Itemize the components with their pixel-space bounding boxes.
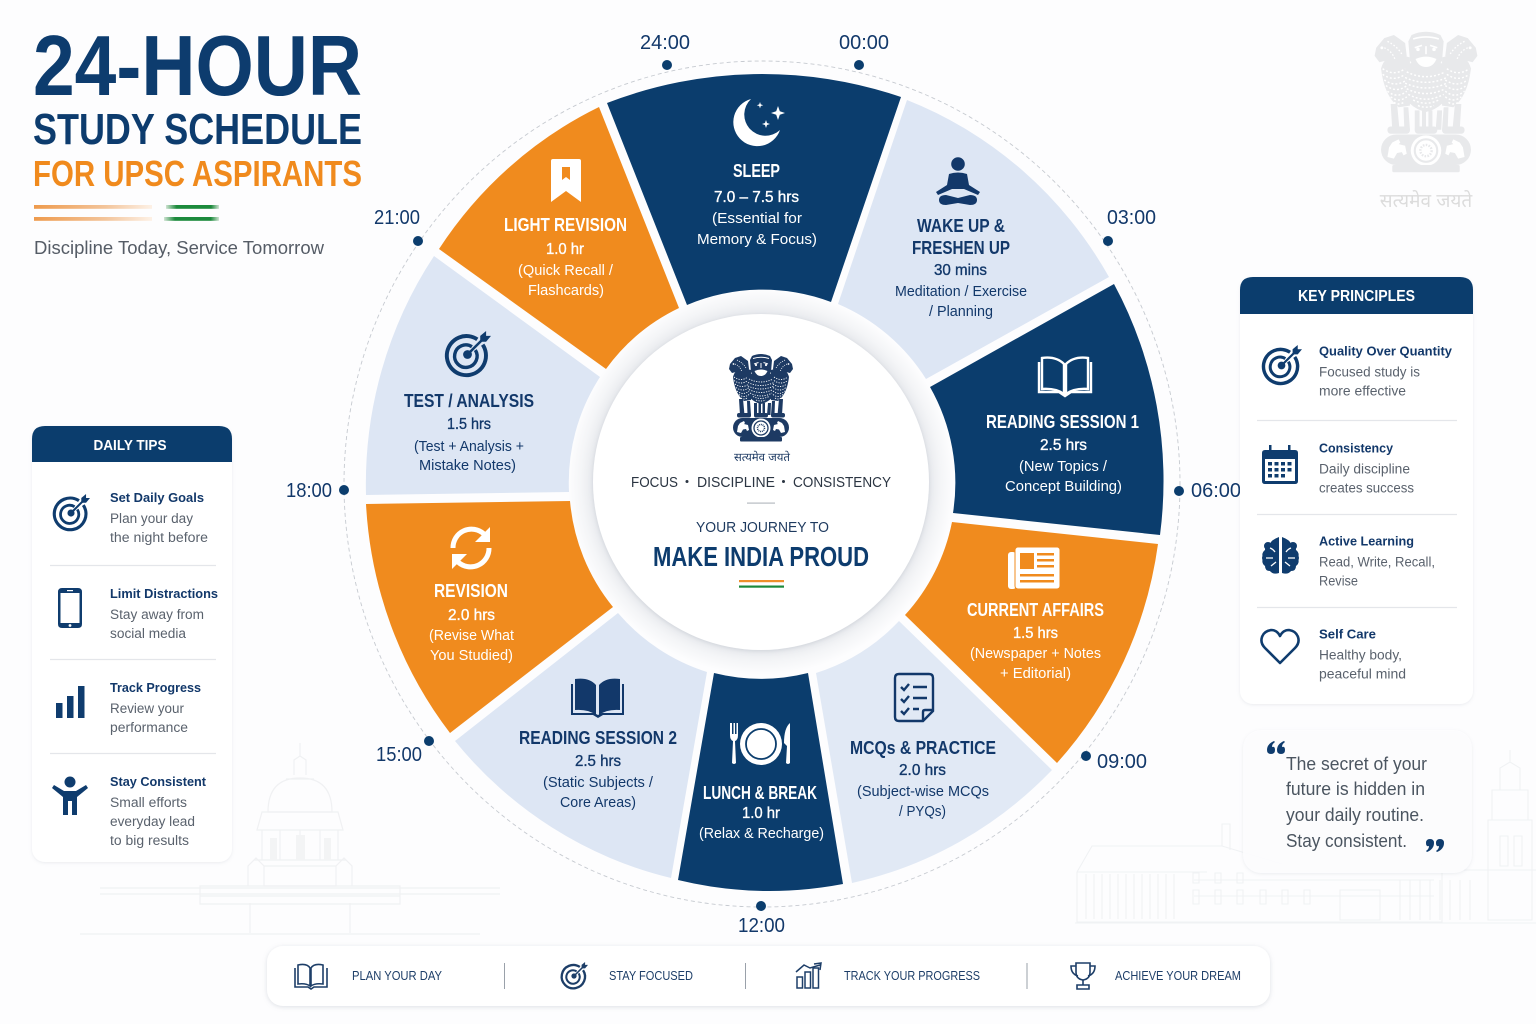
marker 03:00 [1103,207,1156,246]
sector: light revision [439,107,679,369]
principle: active learning: Revise [1319,574,1358,588]
details: current affairs: (Newspaper + Notes [970,646,1101,662]
title: study schedule: STUDY SCHEDULE [33,105,362,154]
action: plan your day: PLAN YOUR DAY [352,968,442,983]
centre tagline: FOCUS [631,475,678,491]
tip: limit distractions: social media [110,626,186,641]
action: track your progress [796,963,980,988]
principle: active learning: Read, Write, Recall, [1319,554,1435,570]
sector: reading session 1 [930,284,1164,535]
heading: reading session 2: READING SESSION 2 [519,727,677,748]
principle: quality over quantity: more effective [1319,384,1406,398]
marker 00:00: 00:00 [839,32,889,54]
header: key principles [1240,277,1473,314]
tip: stay consistent [52,774,207,848]
centre tagline [631,475,891,491]
header: key principles: KEY PRINCIPLES [1298,288,1415,305]
icon: checklist [895,674,933,721]
principle: self care: Healthy body, [1319,648,1402,662]
tip: set daily goals: Set Daily Goals [110,490,204,505]
sector: lunch and break [678,673,843,891]
principle: self care [1261,626,1406,682]
details: light revision: Flashcards) [528,283,604,299]
icon: refresh arrows [452,527,490,569]
quote card [1243,730,1472,873]
details: test and analysis: (Test + Analysis + [414,439,524,455]
icon: moon and stars [733,99,785,146]
details: test and analysis [414,416,524,474]
principle: quality over quantity: Quality Over Quantity [1319,344,1453,358]
marker 18:00: 18:00 [286,480,332,502]
tip: stay consistent: Stay Consistent [110,774,207,789]
heading: revision: REVISION [434,580,508,601]
icon: target [447,331,491,375]
details: mcqs and practice: 2.0 hrs [899,762,946,779]
tip: set daily goals: Plan your day [110,511,193,526]
tip: stay consistent: to big results [110,833,189,848]
heading: lunch and break: LUNCH & BREAK [703,782,817,803]
details: sleep [697,189,817,248]
details: lunch and break: 1.0 hr [742,805,780,822]
watermark: secretariat building [1075,750,1536,923]
opening quote mark [1267,741,1285,754]
principle: consistency: Consistency [1319,440,1394,456]
marker 00:00 [839,32,889,70]
sector: test and analysis [366,256,600,495]
details: mcqs and practice [857,762,989,820]
details: reading session 1: 2.5 hrs [1040,437,1087,454]
quote text: Stay consistent. [1286,831,1407,851]
white mask over ring gap [568,289,954,675]
action: track your progress: TRACK YOUR PROGRESS [844,968,980,983]
tip: limit distractions [58,586,218,641]
action: plan your day [295,964,442,989]
details: test and analysis: 1.5 hrs [447,416,491,433]
principle: quality over quantity [1263,344,1453,398]
icon: newspaper [1008,547,1060,589]
watermark motto: सत्यमेव जयते [1380,189,1473,212]
principle: self care: Self Care [1319,626,1376,642]
panel: daily tips [32,426,232,862]
tip: track progress: Review your [110,701,184,716]
tip: track progress: performance [110,720,188,735]
centre tagline: CONSISTENCY [793,475,891,491]
details: current affairs [970,625,1101,682]
marker 15:00 [376,736,434,766]
details: lunch and break: (Relax & Recharge) [699,826,824,842]
marker 21:00: 21:00 [374,207,420,229]
principle: quality over quantity: Focused study is [1319,364,1420,380]
tip: track progress [56,680,201,735]
details: revision: (Revise What [429,628,514,644]
heading: sleep: SLEEP [733,160,780,181]
heading: wake up and freshen up: FRESHEN UP [912,237,1010,258]
details: light revision: (Quick Recall / [518,263,614,279]
details: wake up: Meditation / Exercise [895,284,1027,300]
action: stay focused: STAY FOCUSED [609,968,693,983]
action: achieve your dream: ACHIEVE YOUR DREAM [1115,968,1241,983]
marker 03:00: 03:00 [1107,207,1156,229]
icon: national emblem [729,354,793,442]
header: daily tips [32,426,232,462]
details: test and analysis: Mistake Notes) [419,458,516,474]
details: lunch and break [699,805,824,842]
icon: meditation [936,157,980,205]
marker 12:00: 12:00 [738,915,785,937]
tricolour mini underline [739,580,784,588]
details: reading session 2: (Static Subjects / [543,775,654,791]
tip: limit distractions: Stay away from [110,607,204,622]
sector: mcqs and practice [816,621,1052,883]
details: wake up: / Planning [929,304,993,320]
bottom action bar [267,946,1270,1006]
centre circle [593,314,929,650]
principle: self care: peaceful mind [1319,666,1406,682]
tip: stay consistent: Small efforts [110,795,187,810]
tip: stay consistent: everyday lead [110,814,195,829]
icon: open book [1039,358,1091,396]
heading: light revision: LIGHT REVISION [504,214,627,235]
dashed time ring [344,61,1180,907]
watermark: dome building [80,743,500,934]
quote text: future is hidden in [1286,779,1425,799]
principle: consistency: Daily discipline [1319,462,1410,476]
action: achieve your dream [1071,963,1241,989]
details: wake up [895,262,1027,320]
details: reading session 1 [1005,437,1122,495]
title: for upsc aspirants: FOR UPSC ASPIRANTS [33,153,362,194]
tricolour underline [34,205,219,221]
details: current affairs: 1.5 hrs [1013,625,1058,642]
details: revision: You Studied) [430,648,513,664]
closing quote mark [1426,839,1444,852]
quote text: The secret of your [1286,754,1427,774]
panel: key principles [1240,277,1473,704]
details: sleep: (Essential for [712,211,802,227]
tip: limit distractions: Limit Distractions [110,586,218,601]
centre tagline: DISCIPLINE [697,475,775,491]
details: reading session 1: (New Topics / [1019,459,1108,475]
icon: open book dark [571,679,624,718]
action: stay focused [562,962,693,988]
details: reading session 2 [543,753,654,811]
heading: reading session 1: READING SESSION 1 [986,411,1139,432]
tip: track progress: Track Progress [110,680,201,695]
details: mcqs and practice: / PYQs) [899,804,946,820]
marker 12:00 [738,901,785,937]
details: revision: 2.0 hrs [448,607,495,624]
tip: set daily goals: the night before [110,530,208,545]
icon: bookmark [551,159,581,202]
principle: consistency [1262,440,1414,496]
details: wake up: 30 mins [934,262,987,279]
title block [33,19,362,258]
details: mcqs and practice: (Subject-wise MCQs [857,784,989,800]
marker 15:00: 15:00 [376,744,422,766]
principle: active learning: Active Learning [1319,534,1414,548]
marker 24:00 [640,32,690,70]
marker 06:00: 06:00 [1191,480,1241,502]
heading: wake up and freshen up [912,215,1010,258]
heading: wake up and freshen up: WAKE UP & [917,215,1005,236]
marker 21:00 [374,207,423,246]
tip: set daily goals [54,490,208,545]
principle: active learning [1262,534,1435,588]
quote text: your daily routine. [1286,805,1424,825]
details: sleep: 7.0 – 7.5 hrs [714,189,799,206]
details: light revision [518,241,614,299]
sector: wake up and freshen up [838,100,1109,379]
quote text [1286,754,1427,851]
sector: reading session 2 [455,613,707,878]
heading: current affairs: CURRENT AFFAIRS [967,599,1104,620]
sector: current affairs [905,522,1158,763]
header: daily tips: DAILY TIPS [94,437,166,454]
marker 24:00: 24:00 [640,32,690,54]
schedule wheel [366,74,1164,891]
marker 09:00: 09:00 [1097,751,1147,773]
tagline: Discipline Today, Service Tomorrow [34,237,325,258]
details: light revision: 1.0 hr [546,241,584,258]
watermark: national emblem top right [1375,32,1477,212]
time markers [286,32,1241,937]
details: reading session 1: Concept Building) [1005,479,1122,495]
sector: sleep [607,74,901,305]
heading: test and analysis: TEST / ANALYSIS [404,390,534,411]
principle: consistency: creates success [1319,480,1414,496]
details: reading session 2: Core Areas) [560,795,636,811]
details: revision [429,607,514,664]
centre headline: MAKE INDIA PROUD [653,541,869,572]
centre subtitle: YOUR JOURNEY TO [696,519,829,536]
emblem motto: सत्यमेव जयते [734,450,790,464]
details: current affairs: + Editorial) [1000,666,1071,682]
title: 24-hour: 24-HOUR [33,19,362,114]
sector: revision [366,501,613,733]
details: reading session 2: 2.5 hrs [575,753,621,770]
icon: plate and cutlery [730,723,790,765]
details: sleep: Memory & Focus) [697,232,817,248]
heading: mcqs and practice: MCQs & PRACTICE [850,737,996,758]
